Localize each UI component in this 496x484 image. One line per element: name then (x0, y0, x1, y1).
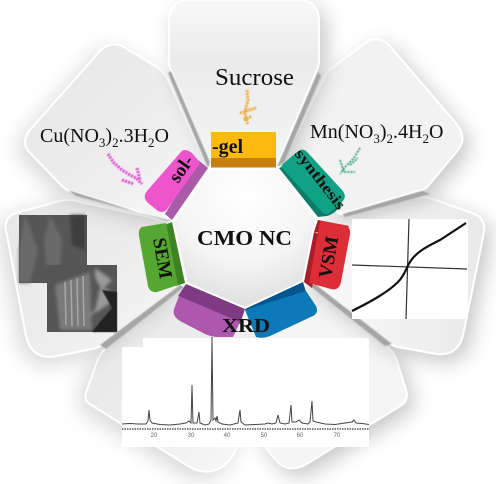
label: sol-: sol- (165, 151, 198, 187)
block: XRD purple (174, 284, 245, 337)
petal: XRD left lobe (86, 285, 260, 472)
label: copper nitrate: ) (105, 125, 112, 147)
label: copper nitrate: O (155, 125, 169, 147)
label: manganese nitrate: Mn(NO (310, 121, 373, 143)
label: manganese nitrate: .4H (393, 121, 422, 143)
axis (122, 428, 369, 430)
molecule: orange (240, 90, 256, 125)
block: -gel (yellow) (211, 132, 276, 168)
petal: Mn nitrate (280, 40, 462, 214)
label: manganese nitrate: 3 (373, 131, 380, 146)
molecule: pink (108, 154, 142, 184)
label: manganese nitrate: O (429, 121, 443, 143)
label: VSM: VSM (315, 235, 343, 280)
axis labels: 30 (188, 433, 195, 439)
VSM chart (352, 219, 468, 319)
axis labels: 50 (261, 433, 268, 439)
SEM images (19, 215, 117, 332)
block: sol- (pink) (145, 150, 208, 220)
label: manganese nitrate: ) (380, 121, 387, 143)
label: Sucrose: Sucrose (215, 65, 294, 91)
centre disc (172, 168, 317, 309)
label: SEM: SEM (148, 236, 176, 280)
label: manganese nitrate: 2 (422, 131, 429, 146)
XRD chart (122, 337, 369, 447)
block: SEM (green) (139, 222, 185, 292)
axis labels: 40 (224, 433, 231, 439)
label: XRD: XRD (222, 315, 270, 337)
petal: VSM (309, 197, 484, 354)
label: synthesis: synthesis (291, 146, 349, 213)
axis labels: 20 (151, 433, 158, 439)
block: synthesis (teal) (279, 146, 349, 217)
petal: XRD right lobe (240, 285, 407, 468)
label: copper nitrate: .3H (119, 125, 148, 147)
label: CMO NC: CMO NC (197, 226, 292, 250)
petal: SEM (6, 200, 182, 357)
label: manganese nitrate: 2 (387, 131, 393, 146)
label: copper nitrate: Cu(NO (40, 125, 99, 147)
molecule: green (340, 148, 360, 174)
label: copper nitrate: 3 (99, 135, 105, 150)
axis labels (151, 433, 341, 439)
petal edge shadows (68, 71, 430, 349)
label: copper nitrate: 2 (148, 135, 155, 150)
petal: Cu nitrate (25, 44, 208, 220)
block: XRD blue (245, 282, 317, 338)
petal: sucrose (169, 0, 319, 168)
XRD pattern line (122, 337, 369, 425)
label: -gel: -gel (212, 136, 244, 158)
label: copper nitrate: 2 (112, 135, 119, 150)
axis labels: 60 (297, 433, 304, 439)
block: VSM (red) (304, 220, 350, 289)
axis labels: 70 (334, 433, 341, 439)
